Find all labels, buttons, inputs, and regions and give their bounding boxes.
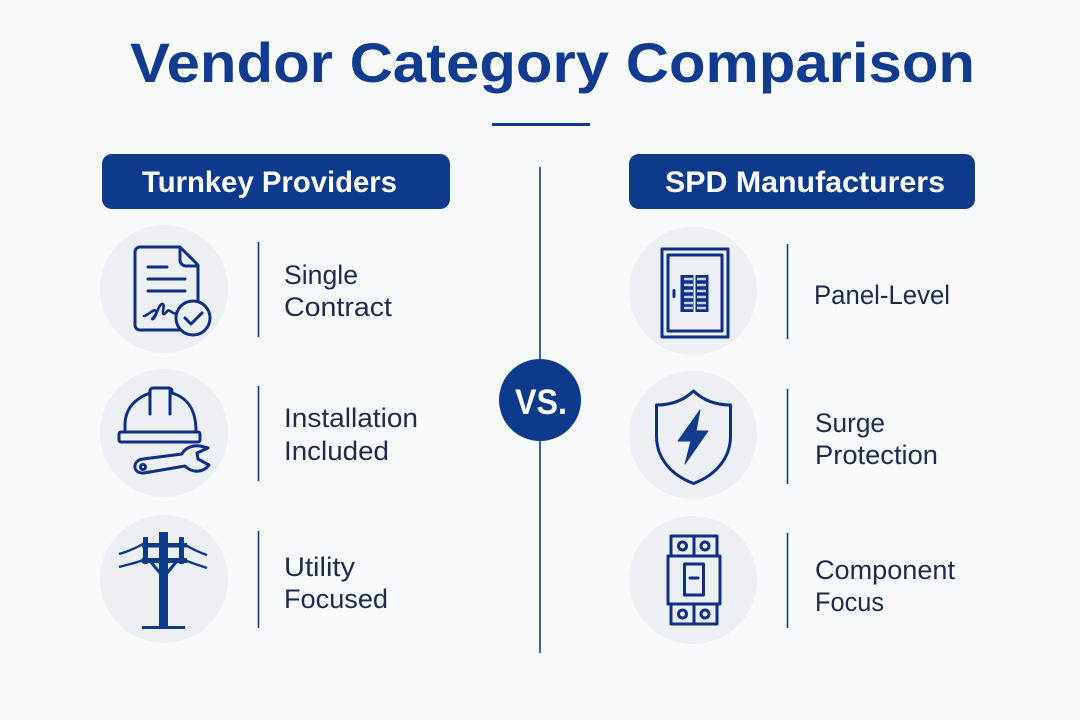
label: Surge bbox=[815, 408, 885, 438]
label bbox=[284, 552, 388, 614]
row: Component Focus bbox=[629, 516, 955, 644]
row: Surge Protection bbox=[629, 371, 938, 499]
label: Component bbox=[815, 555, 955, 585]
VS badge bbox=[499, 359, 581, 441]
icon: hard hat and wrench bbox=[119, 388, 209, 473]
title: Vendor Category Comparison bbox=[130, 31, 975, 94]
label bbox=[815, 408, 938, 470]
label: Focused bbox=[284, 584, 388, 614]
icon: signed contract bbox=[135, 247, 210, 335]
label: Panel-Level bbox=[814, 280, 950, 310]
label bbox=[284, 260, 393, 322]
label: Installation bbox=[284, 403, 418, 433]
heading: SPD Manufacturers: SPD Manufacturers bbox=[665, 166, 945, 199]
icon: utility pole bbox=[119, 532, 207, 629]
heading: Turnkey Providers: Turnkey Providers bbox=[142, 166, 397, 199]
icon: circuit breaker bbox=[668, 536, 720, 624]
row: Panel-Level bbox=[629, 227, 950, 355]
title bbox=[130, 31, 975, 126]
center divider bbox=[539, 167, 541, 653]
heading: SPD Manufacturers bbox=[629, 154, 975, 209]
label: Single bbox=[284, 260, 358, 290]
label: Included bbox=[284, 436, 389, 466]
row: Utility Focused bbox=[100, 515, 388, 643]
row: Installation Included bbox=[100, 369, 418, 497]
panel: SPD Manufacturers bbox=[629, 154, 975, 644]
VS badge: VS. bbox=[515, 383, 567, 422]
icon: electrical panel bbox=[662, 249, 728, 337]
label: Contract bbox=[284, 292, 393, 322]
label: Protection bbox=[815, 440, 938, 470]
label bbox=[815, 555, 955, 617]
heading: Turnkey Providers bbox=[102, 154, 450, 209]
label bbox=[284, 403, 418, 466]
icon: shield with lightning bolt bbox=[656, 391, 730, 484]
label: Utility bbox=[284, 552, 356, 582]
label: Focus bbox=[815, 587, 884, 617]
panel: Turnkey Providers bbox=[100, 154, 450, 643]
row: Single Contract bbox=[100, 225, 393, 353]
